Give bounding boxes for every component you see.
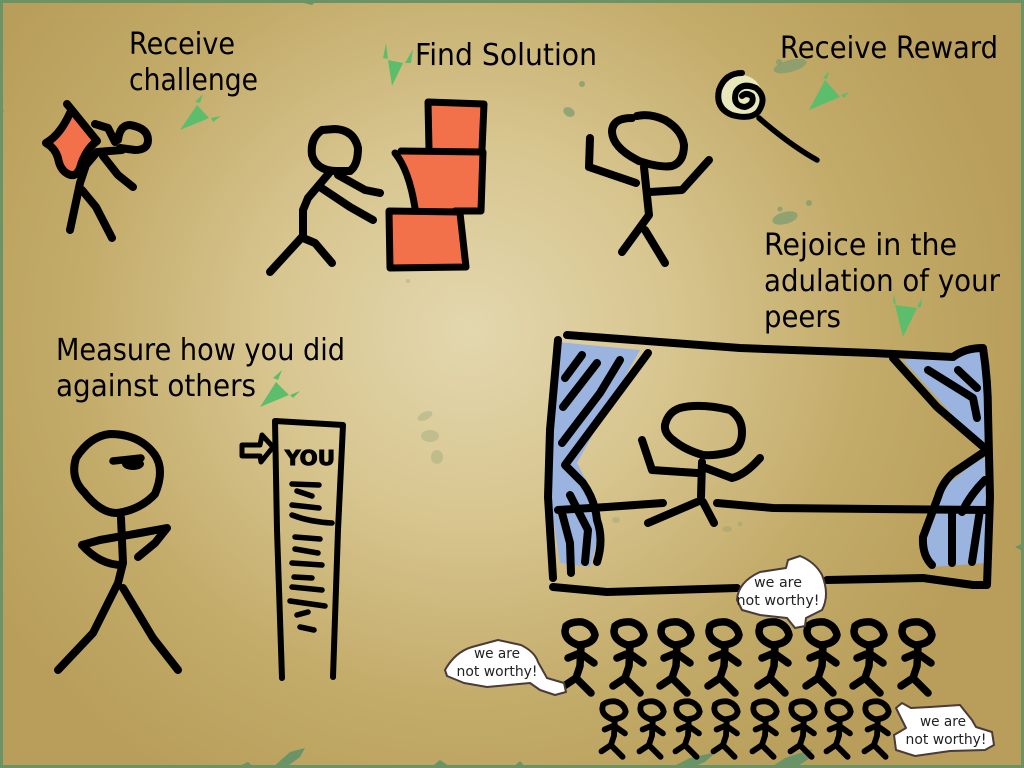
speech bubble: right: not worthy! xyxy=(906,732,986,748)
icon: eye xyxy=(113,458,144,470)
heading: receive challenge: challenge xyxy=(129,63,258,98)
icon: arrow pointing at you xyxy=(242,435,273,462)
arrow: measure marker xyxy=(260,370,300,407)
speech bubble: top: not worthy! xyxy=(736,593,820,609)
box: top xyxy=(428,102,484,150)
arrow: find solution marker xyxy=(383,43,413,86)
speech bubble: left xyxy=(445,640,566,695)
heading: receive challenge xyxy=(129,27,258,98)
heading: measure: against others xyxy=(56,369,256,404)
heading: rejoice: adulation of your xyxy=(764,264,1001,299)
figure: stick person pushing boxes xyxy=(270,129,380,272)
performer on stage xyxy=(642,406,760,523)
right curtain xyxy=(903,350,987,567)
speech bubble: left: not worthy! xyxy=(456,664,538,680)
audience: back row xyxy=(602,701,889,757)
ranking rows xyxy=(290,484,332,630)
speech bubble: right xyxy=(894,703,994,756)
figure: celebrating stick person xyxy=(589,115,709,263)
bottom grass smudges xyxy=(235,748,812,768)
left curtain folds xyxy=(562,353,648,573)
speech bubble: left: we are xyxy=(474,646,520,662)
heading: measure: Measure how you did xyxy=(56,333,345,368)
box: bottom xyxy=(389,211,466,268)
figure: person looking at ranking xyxy=(58,434,178,670)
label: you: YOU xyxy=(284,446,335,470)
heading: receive challenge: Receive xyxy=(129,27,235,62)
left curtain xyxy=(550,342,640,567)
stage floor xyxy=(558,503,987,510)
boxes: orange stack xyxy=(389,102,484,268)
ranking list xyxy=(242,421,343,678)
stage with curtains xyxy=(548,335,990,592)
right curtain folds xyxy=(893,358,987,565)
speech bubble: top xyxy=(736,556,826,628)
speech bubble: right: we are xyxy=(920,714,966,730)
speech bubble: top: we are xyxy=(754,575,802,591)
box: middle xyxy=(395,151,483,211)
heading: rejoice xyxy=(764,228,1001,335)
audience: front row xyxy=(564,622,932,693)
arrow: receive challenge marker xyxy=(180,94,221,130)
smudges xyxy=(406,56,812,532)
arrow: receive reward marker xyxy=(809,71,849,110)
heading: measure xyxy=(56,333,345,404)
heading: receive reward: Receive Reward xyxy=(780,31,998,66)
heading: find solution: Find Solution xyxy=(415,38,597,73)
stage outline xyxy=(548,335,990,592)
heading: rejoice: Rejoice in the xyxy=(764,228,957,263)
figure: stick person holding challenge xyxy=(46,104,148,238)
icon: lollipop reward xyxy=(718,73,817,160)
icon: challenge diamond xyxy=(46,104,97,175)
arrow: rejoice marker xyxy=(893,294,922,337)
heading: rejoice: peers xyxy=(764,300,841,335)
